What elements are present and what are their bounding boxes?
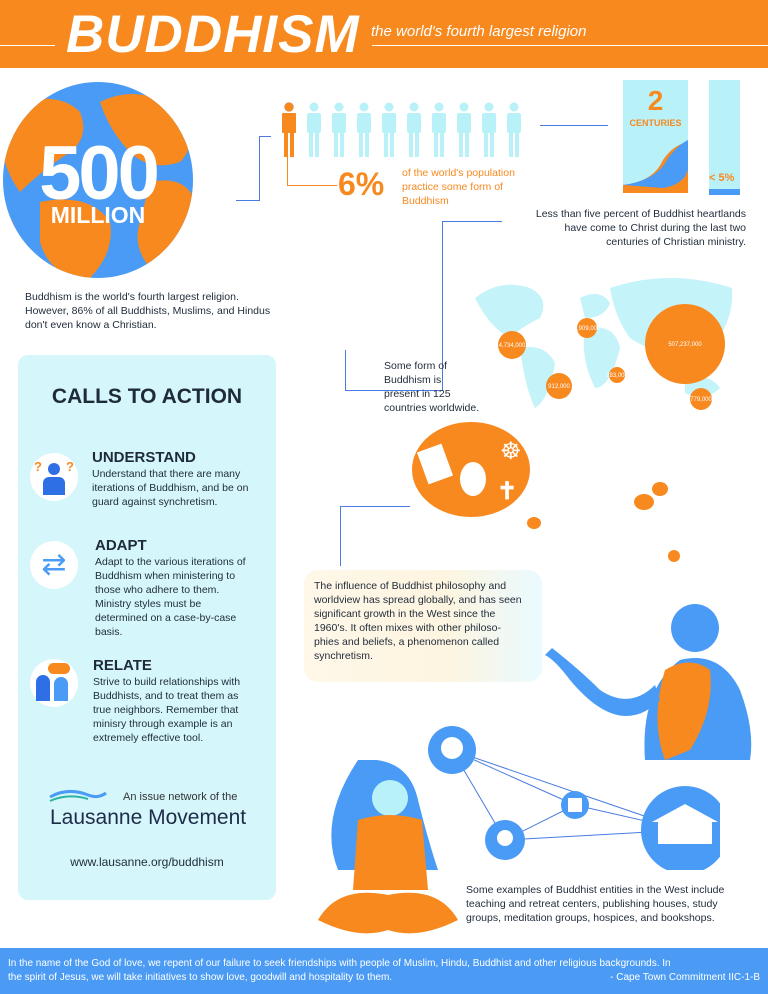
speech bubble: 1960's. It often mixes with other philoso- xyxy=(314,622,501,634)
item: adapt: Adapt to the various iterations of xyxy=(95,556,246,568)
panel heading: CALLS TO ACTION xyxy=(52,385,242,408)
map caption: countries worldwide. xyxy=(384,402,479,414)
entities caption xyxy=(466,884,724,924)
6% stat: practice some form of xyxy=(402,181,503,193)
6% stat: of the world's population xyxy=(402,167,515,179)
thought bubble xyxy=(412,422,680,562)
speech bubble: worldview has spread globally, and has seen xyxy=(314,594,522,606)
item: understand: guard against synchretism. xyxy=(92,496,217,508)
item: adapt: basis. xyxy=(95,626,122,638)
item: adapt: Ministry styles must be xyxy=(95,598,201,610)
meditating figure xyxy=(318,760,458,934)
thought bubble: ✝ xyxy=(497,478,517,505)
people icons xyxy=(282,102,521,157)
title: BUDDHISM xyxy=(66,5,360,64)
map caption: present in 125 xyxy=(384,388,451,400)
globe xyxy=(3,82,193,278)
network diagram xyxy=(428,726,720,870)
footer band xyxy=(0,948,768,994)
map caption xyxy=(384,360,479,414)
url: www.lausanne.org/buddhism xyxy=(70,855,224,869)
calendar: 2 xyxy=(648,85,663,116)
item: adapt: ⇄ xyxy=(41,548,67,581)
world map xyxy=(475,278,732,410)
item: understand: iterations of Buddhism, and be on xyxy=(92,482,248,494)
speech bubble: synchretism. xyxy=(314,650,373,662)
entities caption: Some examples of Buddhist entities in the West include xyxy=(466,884,724,896)
header band xyxy=(0,0,768,68)
world map: 779,000 xyxy=(690,397,712,403)
speech bubble: The influence of Buddhist philosophy and xyxy=(314,580,506,592)
6% stat: 6% xyxy=(338,166,384,202)
world map: 1,909,000 xyxy=(574,326,601,332)
footer band: the spirit of Jesus, we will take initiatives to show love, goodwill and hospitality to them. xyxy=(8,972,392,983)
heartlands text: centuries of Christian ministry. xyxy=(606,236,746,248)
map caption: Buddhism is xyxy=(384,374,441,386)
item: adapt: determined on a case-by-case xyxy=(95,612,236,624)
logo: Lausanne: An issue network of the xyxy=(123,791,237,803)
world map: 283,000 xyxy=(606,373,628,379)
left intro text: Buddhism is the world's fourth largest religion. xyxy=(25,291,239,303)
logo: Lausanne: Lausanne Movement xyxy=(50,806,246,829)
item: understand: UNDERSTAND xyxy=(92,449,196,466)
world map: 507,237,000 xyxy=(668,342,702,348)
heartlands text: Less than five percent of Buddhist heartlands xyxy=(536,208,746,220)
speech bubble: phies and beliefs, a phenomenon called xyxy=(314,636,499,648)
monk figure xyxy=(545,604,752,760)
panel: calls to action xyxy=(18,355,276,900)
globe: 500 xyxy=(39,131,157,216)
item: adapt: those who adhere to them. xyxy=(95,584,219,596)
heartlands text: have come to Christ during the last two xyxy=(564,222,746,234)
item: relate: Strive to build relationships with xyxy=(93,676,240,688)
item: relate: minisry through example is an xyxy=(93,718,232,730)
world map: 912,000 xyxy=(548,384,570,390)
map caption: Some form of xyxy=(384,360,447,372)
subtitle: the world's fourth largest religion xyxy=(371,23,586,40)
footer band: - Cape Town Commitment IIC-1-B xyxy=(610,972,760,983)
6% stat: Buddhism xyxy=(402,195,449,207)
logo: Lausanne xyxy=(49,790,246,829)
speech bubble: significant growth in the West since the xyxy=(314,608,495,620)
item: relate: extremely effective tool. xyxy=(93,732,203,744)
left intro text: don't even know a Christian. xyxy=(25,319,157,331)
6% stat xyxy=(338,166,515,207)
connectors xyxy=(236,200,260,201)
item: relate xyxy=(30,657,240,744)
world map: 4,734,000 xyxy=(499,343,526,349)
item: relate: RELATE xyxy=(93,657,152,674)
item: understand: Understand that there are many xyxy=(92,468,240,480)
entities caption: teaching and retreat centers, publishing houses, study xyxy=(466,898,718,910)
calendar: < 5% xyxy=(709,172,734,184)
item: relate: true neighbors. Remember that xyxy=(93,704,238,716)
item: adapt xyxy=(30,537,246,638)
globe: MILLION xyxy=(51,202,145,228)
left intro text xyxy=(25,291,270,331)
footer band: In the name of the God of love, we repent of our failure to seek friendships with people of Muslim, Hindu, Buddhist and other religious backgrounds. In xyxy=(8,958,671,969)
item: relate: Buddhists, and to treat them as xyxy=(93,690,238,702)
left intro text: However, 86% of all Buddhists, Muslims, and Hindus xyxy=(25,305,270,317)
entities caption: groups, meditation groups, hospices, and bookshops. xyxy=(466,912,715,924)
item: adapt: ADAPT xyxy=(95,537,147,554)
item: understand: ? xyxy=(66,459,74,474)
item: understand xyxy=(30,449,248,508)
calendar: CENTURIES xyxy=(629,118,682,128)
calendar xyxy=(623,80,740,195)
item: adapt: Buddhism when ministering to xyxy=(95,570,235,582)
item: understand: ? xyxy=(34,459,42,474)
heartlands text xyxy=(536,208,746,248)
thought bubble: ☸ xyxy=(500,438,522,465)
speech bubble xyxy=(304,570,542,682)
